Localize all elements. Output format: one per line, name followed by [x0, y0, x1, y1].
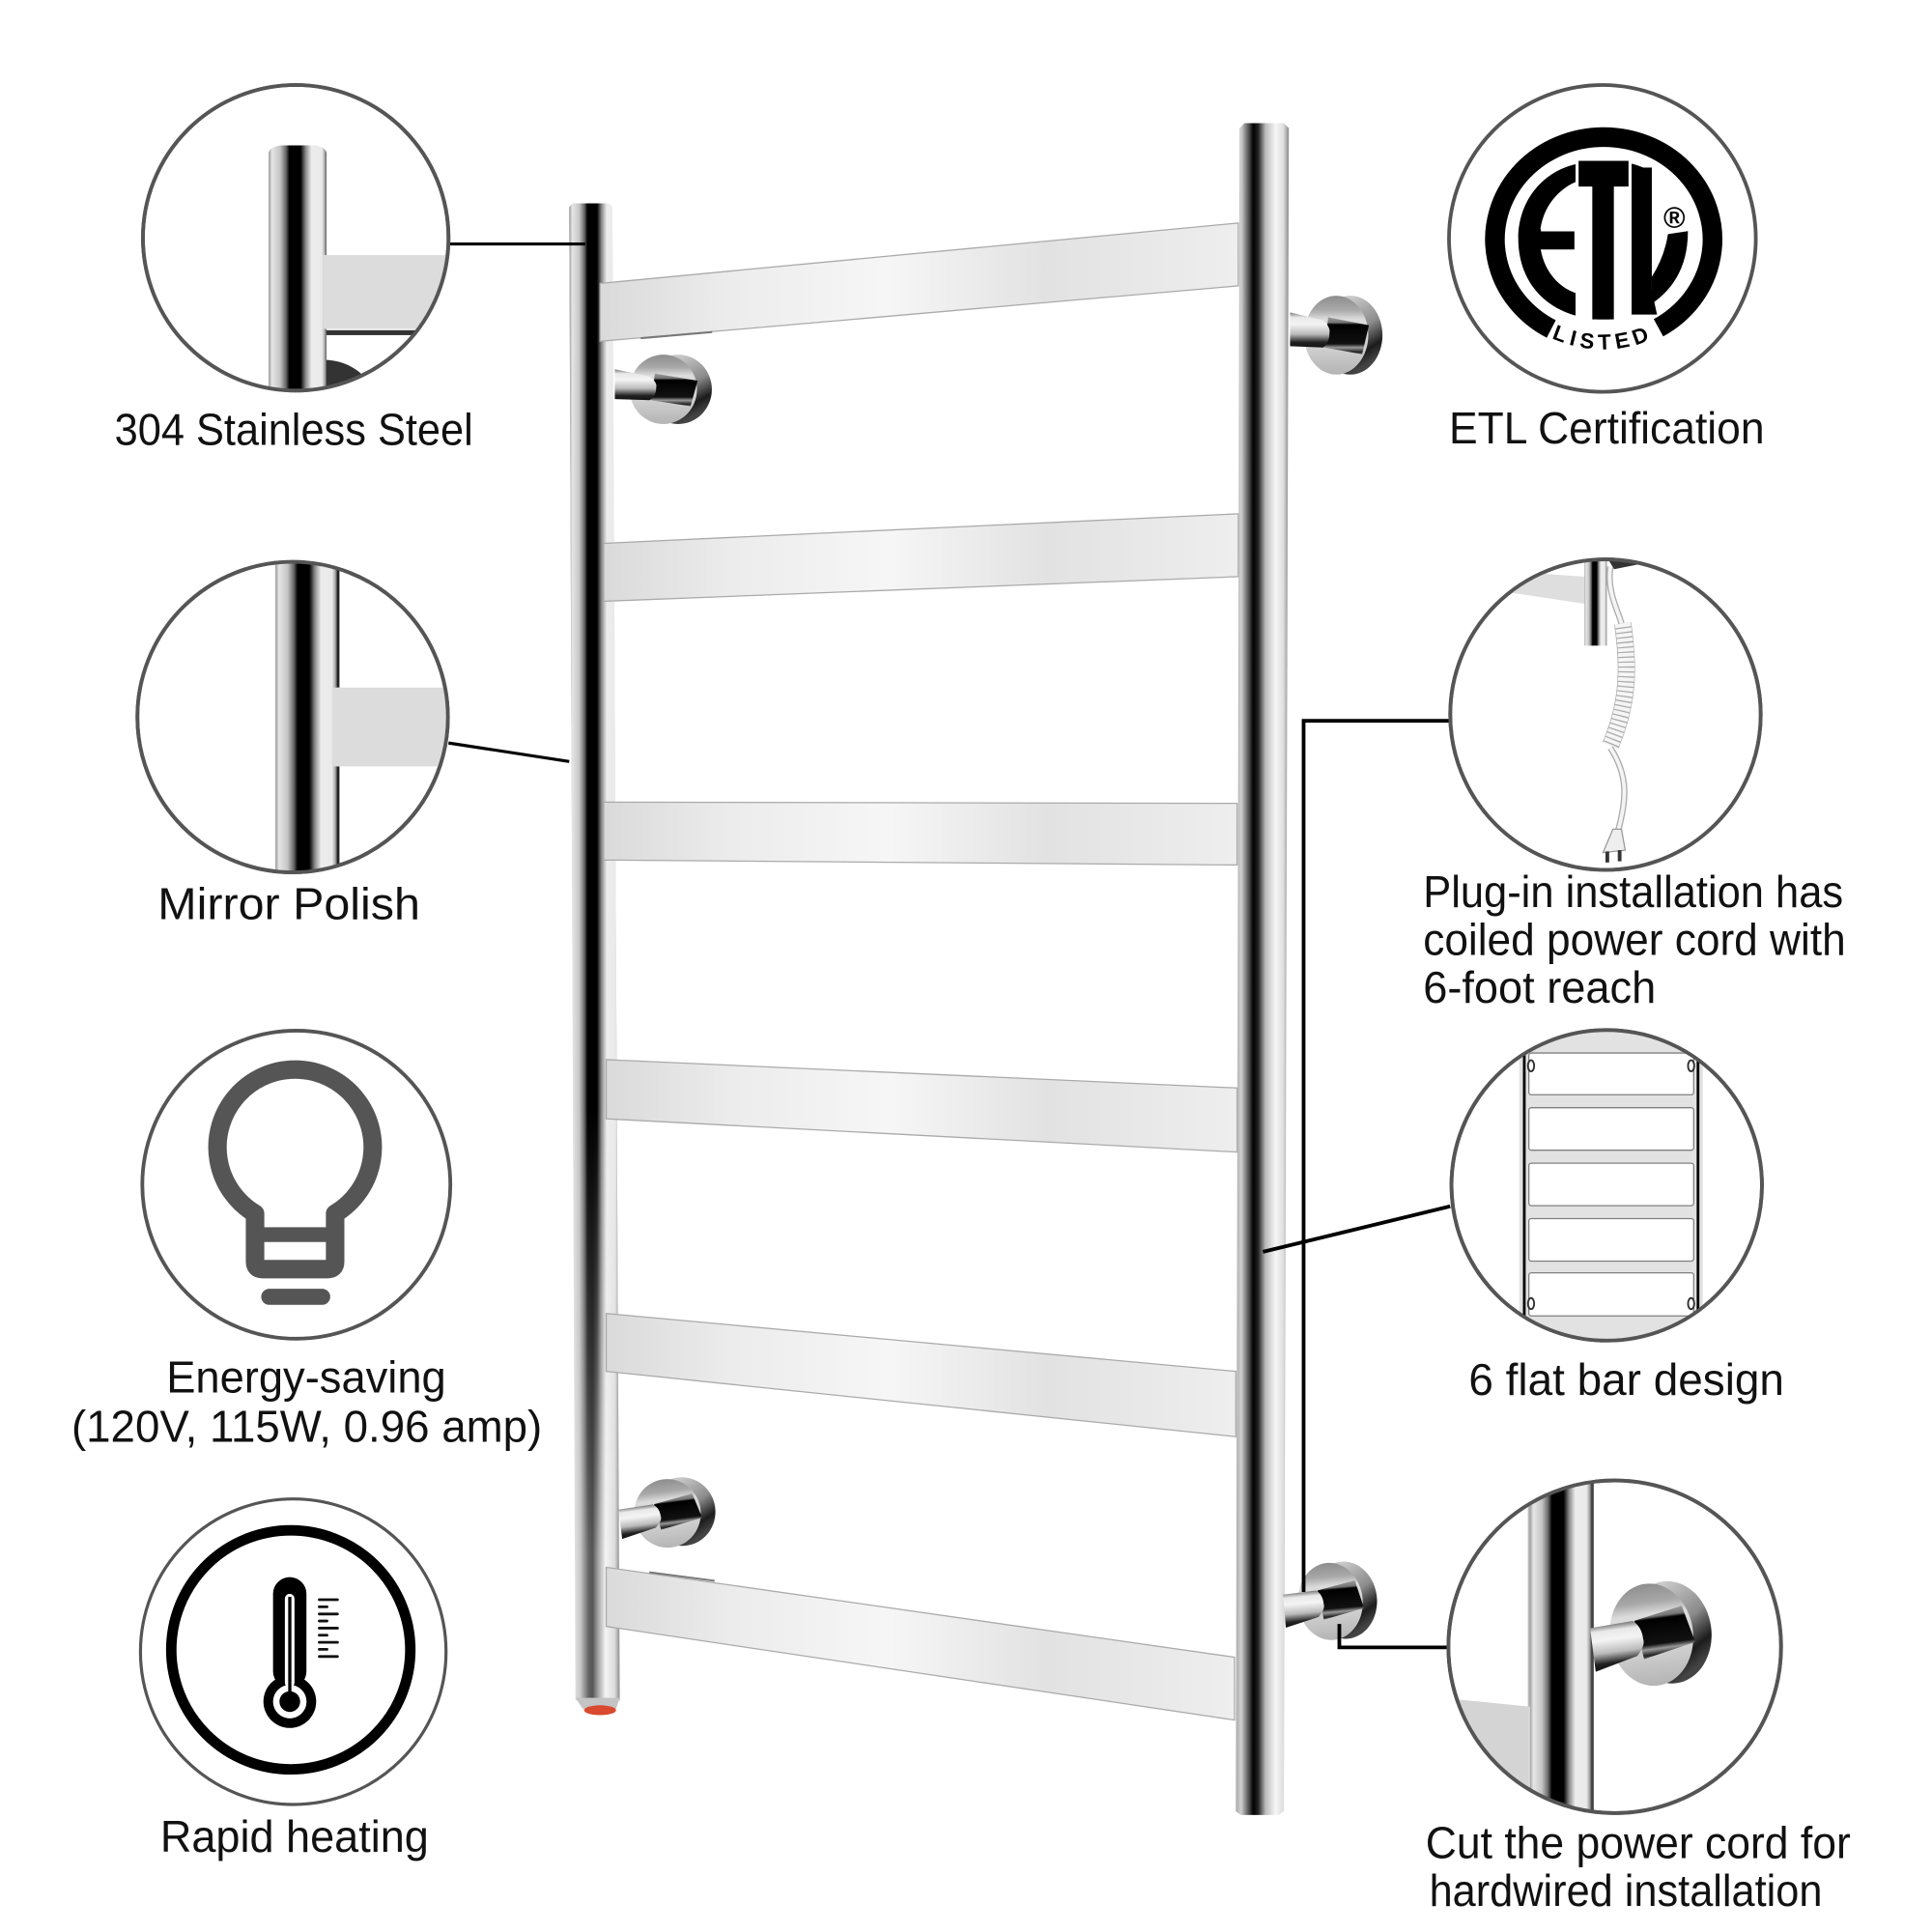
panel: ETL certification [1447, 83, 1758, 394]
label: plug-in installation [1423, 867, 1846, 1012]
flat bar 4 [607, 1060, 1237, 1152]
right pole [1236, 124, 1289, 1815]
reflection mark on flat bar 6 [649, 1573, 715, 1580]
label: energy saving: Energy-saving [166, 1351, 446, 1402]
detail: pole and coiled cord [1512, 561, 1637, 863]
wall bracket top left [614, 355, 712, 424]
circle outline [137, 562, 448, 872]
label: energy saving [71, 1351, 542, 1451]
label: energy saving: (120V, 115W, 0.96 amp) [71, 1401, 542, 1451]
left pole end cap [576, 1698, 620, 1709]
icon: ETL listed logo: ® [1663, 202, 1686, 235]
detail: miniature rack [1520, 1023, 1703, 1343]
icon: thermometer [264, 1577, 339, 1728]
icon: ETL listed logo: T [1577, 112, 1630, 369]
label: plug-in installation: Plug-in installation has [1423, 867, 1843, 917]
icon: ETL listed logo: E [1521, 144, 1582, 340]
icon ring [171, 1530, 411, 1770]
panel: energy saving [142, 1031, 450, 1339]
label: hardwired installation [1426, 1817, 1851, 1916]
label: rapid heating: Rapid heating [160, 1811, 429, 1861]
circle outline [142, 1031, 450, 1339]
circle outline [1450, 559, 1761, 870]
left pole heating tip [584, 1705, 616, 1716]
icon: ETL listed logo [1485, 112, 1722, 369]
left pole dark reflection [569, 203, 618, 1529]
flat bar 1 [600, 223, 1238, 341]
label: 304 stainless steel: 304 Stainless Steel [115, 404, 473, 454]
panel: 6 flat bar design [1452, 1023, 1762, 1343]
callout line: hardwired [1339, 1624, 1449, 1647]
label: plug-in installation: coiled power cord with [1423, 915, 1846, 965]
label: hardwired installation: Cut the power cord for [1426, 1817, 1851, 1867]
callout line: plug-in [1303, 721, 1450, 1592]
panel: rapid heating [140, 1499, 446, 1804]
icon: ETL listed logo: LISTED [1552, 325, 1648, 350]
label: hardwired installation: hardwired installation [1430, 1865, 1822, 1916]
flat bar 5 [607, 1314, 1236, 1436]
circle outline [1452, 1030, 1762, 1341]
callout line: flat bar [1263, 1207, 1450, 1252]
panel: 304 stainless steel [143, 85, 453, 407]
callout line: mirror polish [448, 743, 569, 761]
circle outline [143, 85, 448, 390]
callout line: stainless steel [448, 242, 585, 245]
panel: plug-in installation [1450, 554, 1761, 870]
flat bar 2 [604, 514, 1238, 601]
wall bracket bottom right [1281, 1559, 1380, 1644]
detail: pole and bar [275, 564, 446, 870]
icon: light bulb [217, 1069, 373, 1305]
label: mirror polish: Mirror Polish [157, 879, 420, 929]
flat bar 6 [607, 1567, 1235, 1720]
circle outline [1448, 1481, 1781, 1813]
detail: pole and wall bracket [1459, 1484, 1712, 1810]
reflection mark on flat bar 1 [640, 332, 712, 338]
left pole [569, 203, 620, 1700]
icon: ETL listed logo: L [1622, 117, 1707, 362]
label: plug-in installation: 6-foot reach [1423, 962, 1656, 1012]
wall bracket top right [1290, 296, 1382, 375]
label: ETL certification: ETL Certification [1449, 403, 1765, 453]
circle outline [140, 1499, 446, 1804]
detail: pole and bar [269, 145, 446, 388]
wall bracket bottom left [615, 1473, 720, 1553]
panel: hardwired installation [1448, 1472, 1781, 1824]
label: 6 flat bar design: 6 flat bar design [1468, 1354, 1784, 1405]
circle outline [1449, 85, 1756, 392]
towel rack product [569, 124, 1382, 1815]
panel: mirror polish [137, 554, 455, 881]
flat bar 3 [604, 802, 1237, 865]
